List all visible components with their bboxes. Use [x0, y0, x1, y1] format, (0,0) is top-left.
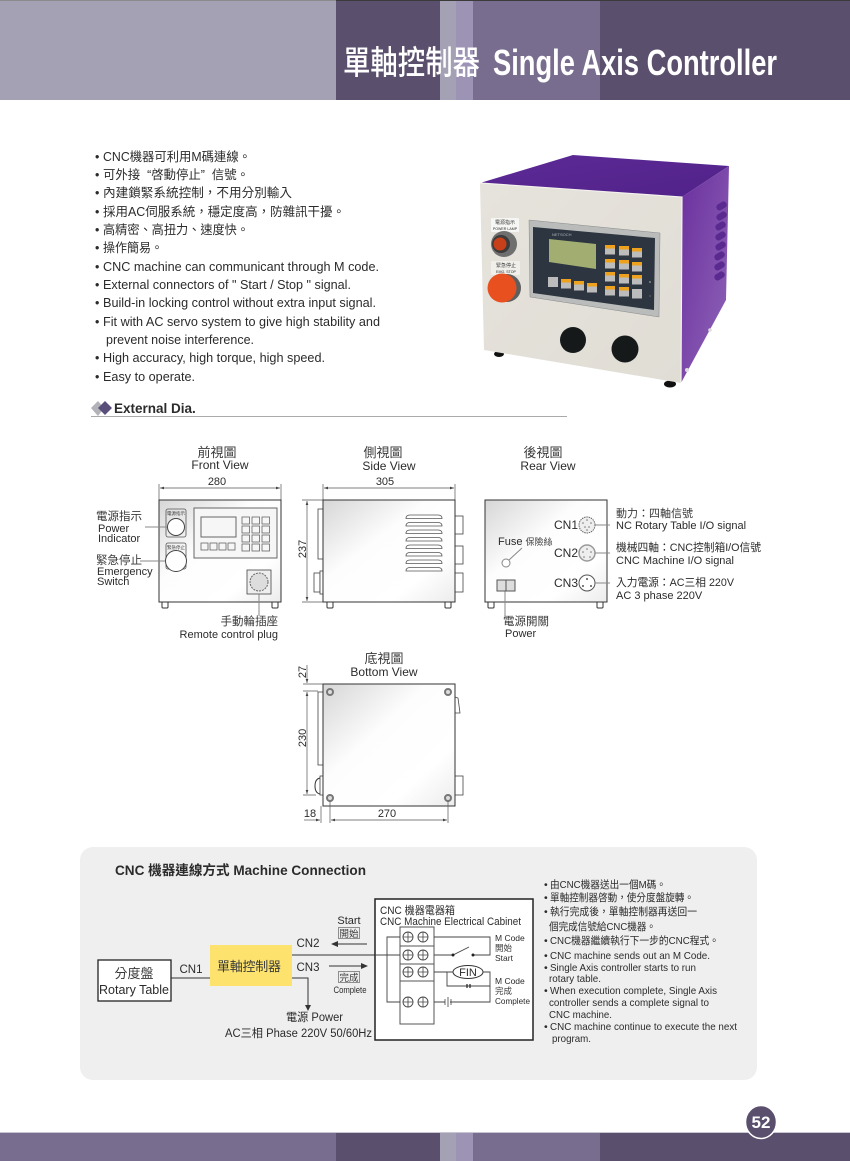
front view drawing: 280 — [208, 476, 226, 488]
side view drawing: 側視圖 — [363, 442, 403, 461]
feature list: 採用AC伺服系統，穩定度高，防雜訊干擾。 — [103, 204, 345, 219]
feature list: • — [95, 370, 99, 384]
power lamp: POWER LAMP — [493, 227, 518, 231]
connection notes: • — [544, 985, 548, 997]
feature list: • — [95, 296, 99, 310]
wiring from controller: CN3 — [296, 962, 320, 974]
front view drawing: 電源指示 — [96, 508, 142, 524]
CNC electrical cabinet: M Code — [495, 933, 525, 943]
feature list: • — [95, 278, 99, 292]
bottom view drawing: 230 — [297, 729, 309, 747]
page number — [746, 1106, 776, 1138]
CNC electrical cabinet: Start — [495, 953, 514, 963]
rear view drawing — [485, 442, 761, 640]
rear view drawing: AC 3 phase 220V — [616, 590, 703, 602]
rear view drawing: 後視圖 — [523, 442, 563, 461]
complete label — [334, 970, 366, 996]
bottom view drawing: Bottom View — [350, 665, 418, 679]
rear view drawing: 機械四軸：CNC控制箱I/O信號 — [616, 540, 761, 554]
power lamp — [491, 218, 519, 257]
CNC electrical cabinet: CNC Machine Electrical Cabinet — [380, 916, 521, 928]
start label — [337, 915, 361, 940]
emergency stop: 緊急停止 — [496, 262, 516, 269]
header banner — [0, 0, 850, 100]
control panel: NETSOCH — [552, 232, 572, 237]
bottom view drawing: 27 — [297, 666, 309, 678]
connection notes: CNC機器繼續執行下一步的CNC程式。 — [550, 934, 719, 947]
feature list: 可外接 “啓動停止” 信號。 — [103, 167, 249, 182]
front view drawing: Emergency — [97, 566, 153, 578]
CNC electrical cabinet: 開始 — [495, 942, 513, 954]
power label: 電源 Power — [286, 1010, 343, 1024]
rear view drawing: 動力：四軸信號 — [616, 505, 693, 521]
title — [343, 36, 777, 84]
side view drawing: 237 — [297, 540, 309, 558]
footer band — [0, 1132, 850, 1161]
connection notes: 個完成信號給CNC機器。 — [549, 920, 656, 933]
feature list: Fit with AC servo system to give high stability and — [103, 315, 380, 329]
CNC electrical cabinet: M Code — [495, 976, 525, 986]
power label: AC三相 Phase 220V 50/60Hz — [225, 1027, 372, 1040]
control panel — [529, 220, 660, 317]
front view drawing: Switch — [97, 576, 129, 588]
power lamp: 電源指示 — [495, 219, 515, 226]
connection notes: • — [544, 935, 548, 947]
bottom view drawing: 18 — [304, 808, 316, 820]
feature list: Easy to operate. — [103, 370, 195, 384]
start label: Start — [337, 915, 361, 927]
CNC electrical cabinet: Complete — [495, 996, 530, 1006]
connection notes: • — [544, 892, 548, 904]
single axis controller box: 單軸控制器 — [217, 956, 281, 975]
panel: machine connection — [80, 847, 757, 1080]
rear view drawing: NC Rotary Table I/O signal — [616, 520, 746, 532]
bottom view drawing: 底視圖 — [364, 648, 404, 667]
feature list: High accuracy, high torque, high speed. — [103, 351, 325, 365]
section heading: External Dia. — [91, 401, 567, 417]
connection notes: When execution complete, Single Axis — [550, 985, 717, 997]
feature list: 操作簡易。 — [103, 240, 163, 255]
feature list: • — [95, 223, 99, 237]
rotary table box: 分度盤 — [114, 963, 154, 982]
feature list: • — [95, 150, 99, 164]
feature list: • — [95, 241, 99, 255]
connection notes: • — [544, 879, 548, 891]
CNC electrical cabinet: FIN — [459, 967, 477, 979]
connection notes: rotary table. — [549, 973, 601, 985]
rotary table box — [98, 960, 171, 1001]
connection notes: CNC machine. — [549, 1009, 612, 1021]
side view drawing: Side View — [362, 459, 416, 473]
page number: 52 — [752, 1113, 770, 1132]
wiring from controller — [171, 938, 400, 1011]
section heading: External Dia.: External Dia. — [114, 401, 196, 416]
CNC electrical cabinet: 完成 — [495, 985, 513, 997]
feature list: 高精密、高扭力、速度快。 — [103, 222, 249, 237]
connection notes: • — [544, 1021, 548, 1033]
front view drawing — [96, 442, 281, 641]
front view drawing: Front View — [191, 458, 249, 472]
rear view drawing: Rear View — [520, 459, 576, 473]
connection notes: controller sends a complete signal to — [549, 997, 709, 1009]
feature list: External connectors of " Start / Stop " signal. — [103, 278, 351, 292]
feature list: • — [95, 315, 99, 329]
feature list: Build-in locking control without extra input signal. — [103, 296, 376, 310]
feature list: • — [95, 186, 99, 200]
front view drawing: 緊急停止 — [167, 544, 185, 551]
complete label: 完成 — [339, 970, 359, 984]
front view drawing: Indicator — [98, 533, 141, 545]
connection notes: CNC machine continue to execute the next — [550, 1021, 737, 1033]
front view drawing: 手動輪插座 — [220, 613, 278, 629]
single axis controller box — [210, 945, 292, 986]
connection notes: program. — [552, 1033, 591, 1045]
rear view drawing: CNC Machine I/O signal — [616, 555, 734, 567]
feature list: CNC機器可利用M碼連線。 — [103, 149, 251, 164]
front view drawing: Remote control plug — [180, 629, 278, 641]
feature list — [95, 149, 380, 384]
connection notes — [544, 878, 737, 1045]
connection notes: • — [544, 962, 548, 974]
rear view drawing: Fuse 保險絲 — [498, 535, 553, 548]
feature list: 內建鎖緊系統控制，不用分別輸入 — [103, 185, 292, 200]
cable holes — [560, 327, 638, 362]
emergency stop: EMG. STOP — [496, 270, 517, 274]
side view drawing: 305 — [376, 476, 394, 488]
connection heading: CNC 機器連線方式 Machine Connection — [115, 862, 366, 878]
power label — [225, 1010, 372, 1040]
feature list: • — [95, 168, 99, 182]
front view drawing: 緊急停止 — [96, 552, 142, 568]
CNC electrical cabinet: CNC 機器電器箱 — [380, 903, 455, 917]
front view drawing: 前視圖 — [197, 442, 237, 461]
rear view drawing: CN1 — [554, 518, 578, 532]
feature list: CNC machine can communicant through M code. — [103, 260, 379, 274]
emergency stop — [488, 261, 521, 302]
rear view drawing: CN2 — [554, 546, 578, 560]
feature list: prevent noise interference. — [106, 333, 254, 347]
feature list: • — [95, 205, 99, 219]
feature list: • — [95, 260, 99, 274]
connection notes: Single Axis controller starts to run — [550, 962, 696, 974]
wiring from controller: CN1 — [179, 964, 203, 976]
bottom view drawing — [297, 648, 463, 823]
connection notes: • — [544, 906, 548, 918]
connection notes: 單軸控制器啓動，使分度盤旋轉。 — [550, 891, 694, 904]
title: 單軸控制器 — [343, 36, 480, 84]
connection notes: 執行完成後，單軸控制器再送回一 — [550, 905, 697, 918]
complete label: Complete — [334, 985, 366, 996]
rear view drawing: CN3 — [554, 576, 578, 590]
connection notes: CNC machine sends out an M Code. — [550, 950, 710, 962]
bottom view drawing: 270 — [378, 808, 396, 820]
connection notes: 由CNC機器送出一個M碼。 — [550, 878, 666, 891]
front view drawing: Power — [98, 523, 130, 535]
rear view drawing: 入力電源：AC三相 220V — [616, 575, 735, 589]
wiring from controller: CN2 — [296, 938, 320, 950]
side view drawing — [297, 442, 463, 608]
CNC electrical cabinet — [375, 899, 533, 1040]
product photo: controller box — [480, 155, 729, 388]
rear view drawing: Power — [505, 628, 537, 640]
start label: 開始 — [339, 926, 359, 940]
rotary table box: Rotary Table — [99, 983, 169, 997]
front view drawing: 電源指示 — [167, 510, 185, 517]
feature list: • — [95, 351, 99, 365]
rear view drawing: 電源開關 — [503, 613, 549, 629]
connection notes: • — [544, 950, 548, 962]
